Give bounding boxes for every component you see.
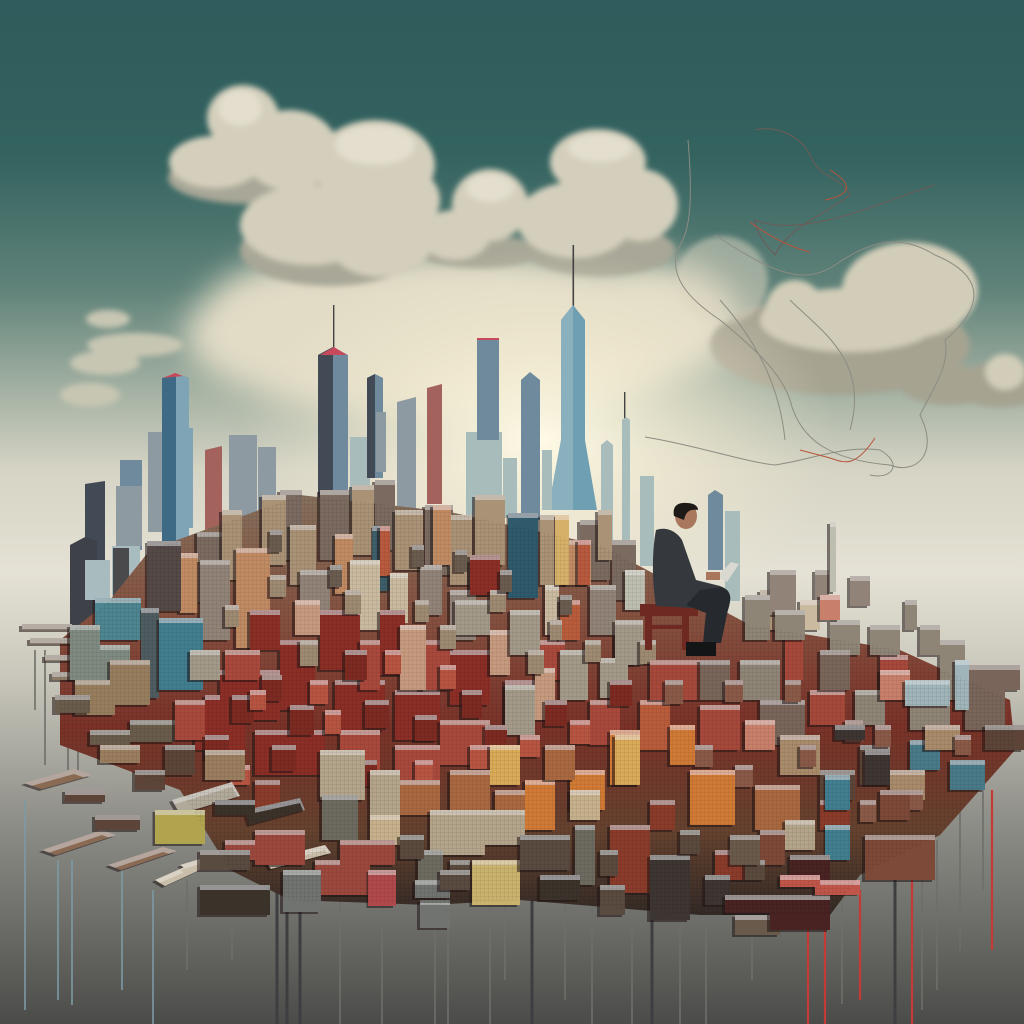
texture grid over city xyxy=(60,495,1015,915)
businessman seated on stool xyxy=(640,503,739,656)
tower spires xyxy=(333,245,625,422)
stool xyxy=(640,604,698,650)
city blocks: left stepped edge xyxy=(22,624,175,745)
city blocks: red central district xyxy=(175,555,670,780)
skyline: distant towers xyxy=(70,245,740,625)
city blocks: orange central front xyxy=(255,725,935,920)
tablet xyxy=(717,562,739,582)
wire scribble xyxy=(645,129,974,476)
head xyxy=(675,503,697,529)
city mass xyxy=(60,495,1015,915)
sun glow xyxy=(240,250,840,630)
cloud: right xyxy=(676,236,1024,407)
city blocks: foreground slabs xyxy=(24,745,860,935)
city blocks: upper tan district xyxy=(95,480,870,698)
drip lines: hanging threads xyxy=(25,650,992,1024)
cloud: soft lower body xyxy=(185,250,740,420)
city blocks: right district xyxy=(650,595,1024,822)
tower: main blue spire xyxy=(548,305,597,510)
hair xyxy=(674,503,698,520)
shoe xyxy=(686,642,716,656)
city blocks: small red detail xyxy=(205,530,656,786)
hand xyxy=(706,572,720,580)
towers: slate mid row xyxy=(120,340,723,570)
trousers xyxy=(686,587,730,643)
towers: pale back row xyxy=(350,417,740,601)
cloud: upper left xyxy=(168,85,678,286)
cloud wisps: left xyxy=(60,310,183,407)
jacket xyxy=(653,529,730,610)
